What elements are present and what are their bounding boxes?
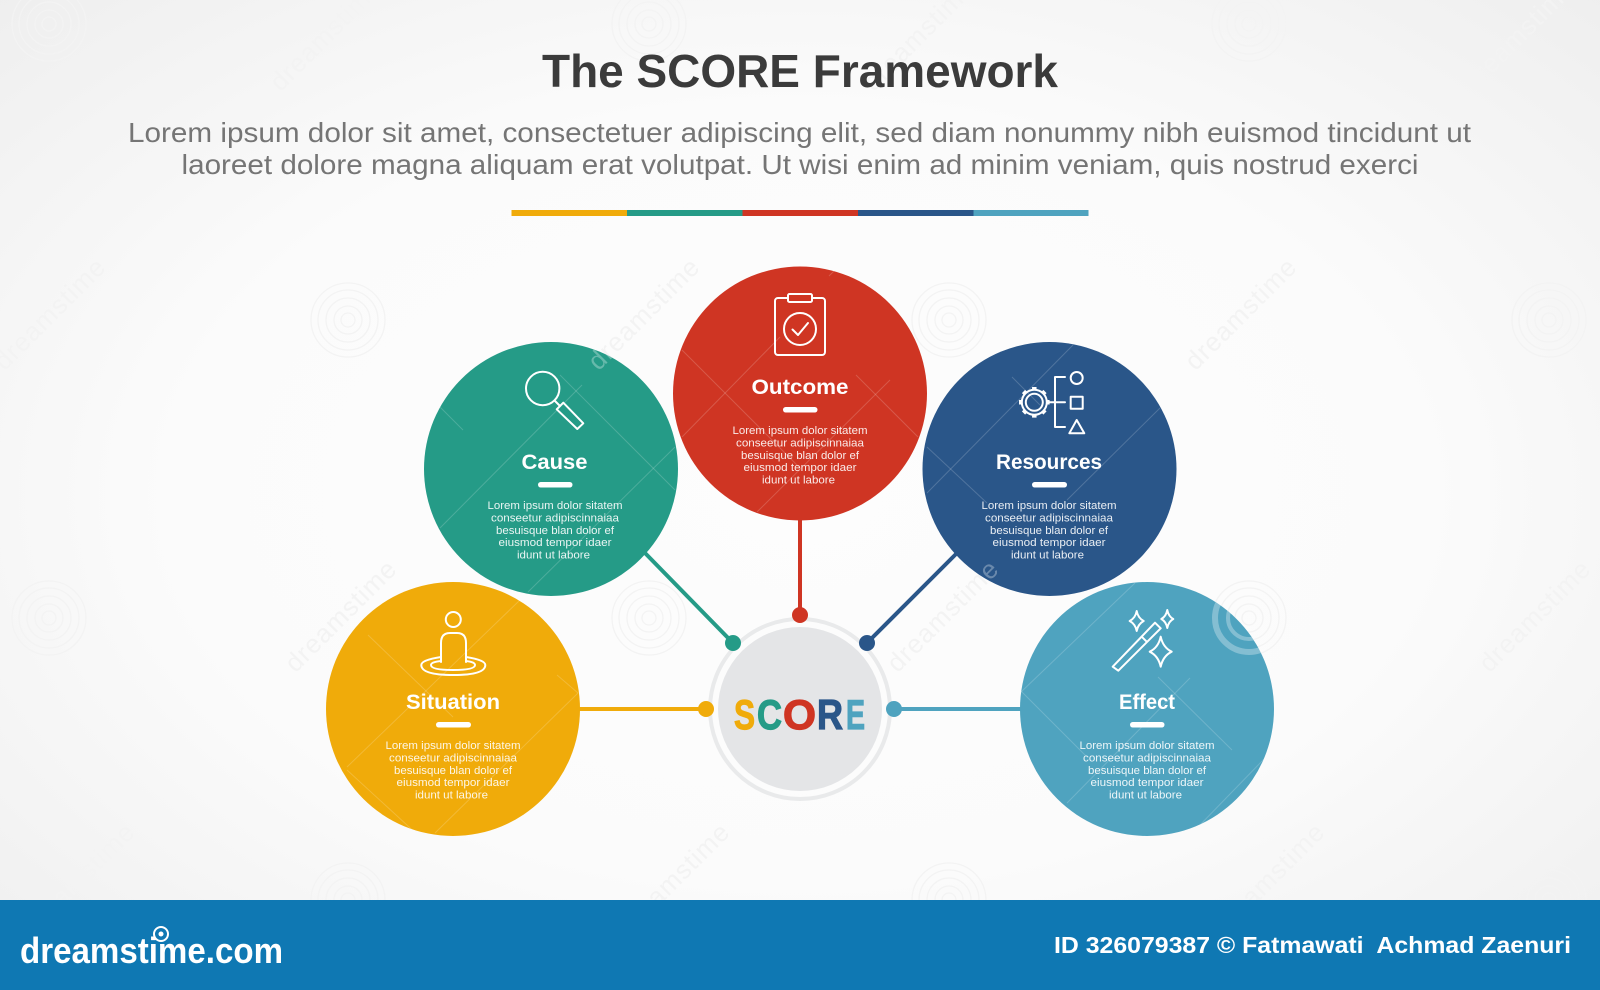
colored divider bar	[512, 210, 1088, 216]
dash	[1130, 722, 1164, 728]
dash	[538, 482, 572, 488]
body text: besuisque blan dolor ef	[741, 450, 860, 462]
panel: Effect	[1020, 582, 1274, 836]
infographic canvas: dreamstime	[1472, 553, 1597, 678]
subtitle text	[128, 117, 1471, 180]
panel: Resources	[922, 342, 1176, 596]
body text	[1080, 740, 1214, 802]
body text: Lorem ipsum dolor sitatem	[386, 740, 520, 752]
connector: Situation to hub	[578, 701, 714, 717]
infographic canvas: dreamstime	[1178, 251, 1303, 376]
body text	[732, 425, 868, 487]
body text: besuisque blan dolor ef	[1088, 765, 1207, 777]
icon: person in target	[421, 612, 485, 675]
panel: Cause	[424, 342, 678, 596]
connector: Effect to hub	[886, 701, 1022, 717]
infographic canvas: dreamstime	[581, 251, 706, 376]
body text: conseetur adipiscinnaiaa	[491, 512, 620, 524]
body text: idunt ut labore	[1011, 550, 1084, 562]
body text	[386, 740, 520, 802]
body text: eiusmod tempor idaer	[498, 537, 612, 549]
body text: idunt ut labore	[517, 550, 590, 562]
infographic canvas: dreamstime	[880, 553, 1005, 678]
body text: idunt ut labore	[415, 790, 488, 802]
dash	[783, 407, 818, 412]
icon: clipboard with check	[775, 294, 825, 355]
infographic canvas: dreamstime	[611, 816, 736, 941]
hub label: SCORE: E	[846, 691, 865, 738]
panel: Situation	[326, 582, 580, 837]
body text: idunt ut labore	[1109, 790, 1182, 802]
body text	[488, 500, 622, 562]
body text	[982, 500, 1116, 562]
body text: eiusmod tempor idaer	[992, 537, 1106, 549]
infographic canvas: dreamstime	[581, 251, 706, 376]
heading: Outcome: Outcome	[752, 376, 848, 399]
body text: eiusmod tempor idaer	[396, 777, 510, 789]
center hub: SCORE	[710, 619, 890, 799]
body text: idunt ut labore	[762, 475, 835, 487]
connector: Cause to hub	[645, 553, 741, 651]
hub label: SCORE: C	[757, 691, 782, 738]
body text: Lorem ipsum dolor sitatem	[488, 500, 622, 512]
panel: Outcome	[673, 260, 927, 520]
title: The SCORE Framework	[542, 45, 1058, 97]
hub label: SCORE: S	[734, 691, 755, 738]
dash	[1032, 482, 1067, 488]
infographic canvas: dreamstime	[16, 816, 141, 941]
body text: Lorem ipsum dolor sitatem	[732, 425, 868, 437]
hub label: SCORE: O	[783, 691, 816, 738]
body text: conseetur adipiscinnaiaa	[736, 437, 865, 449]
dash	[436, 722, 471, 728]
infographic canvas: dreamstime	[1206, 816, 1331, 941]
icon: gear with shapes	[1019, 372, 1084, 433]
hub label: SCORE: R	[817, 691, 843, 738]
subtitle text: Lorem ipsum dolor sit amet, consectetuer adipiscing elit, sed diam nonummy nibh euismod tincidunt ut	[128, 117, 1471, 148]
body text: besuisque blan dolor ef	[394, 765, 513, 777]
icon: magnifying glass	[526, 372, 583, 429]
body text: besuisque blan dolor ef	[496, 525, 615, 537]
body text: Lorem ipsum dolor sitatem	[982, 500, 1116, 512]
icon: magic wand with sparkles	[1113, 610, 1173, 671]
infographic canvas: dreamstime	[880, 553, 1005, 678]
body text: eiusmod tempor idaer	[744, 462, 857, 474]
body text: conseetur adipiscinnaiaa	[985, 512, 1114, 524]
heading: Effect: Effect	[1119, 691, 1175, 714]
heading: Resources: Resources	[996, 451, 1102, 474]
infographic canvas: dreamstime	[278, 553, 403, 678]
heading: Cause: Cause	[522, 451, 588, 474]
footer credit: ID 326079387 © Fatmawati Achmad Zaenuri	[1054, 932, 1571, 958]
connector: Resources to hub	[859, 553, 957, 651]
body text: Lorem ipsum dolor sitatem	[1080, 740, 1214, 752]
connector: Outcome to hub	[792, 518, 808, 623]
footer bar	[0, 900, 1600, 990]
heading: Situation: Situation	[406, 691, 500, 714]
footer logo: dreamstime.com: dreamstime.com	[20, 930, 283, 971]
body text: conseetur adipiscinnaiaa	[389, 752, 518, 764]
body text: besuisque blan dolor ef	[990, 525, 1109, 537]
hub label: SCORE	[734, 691, 865, 738]
body text: conseetur adipiscinnaiaa	[1083, 752, 1212, 764]
subtitle text: laoreet dolore magna aliquam erat volutpat. Ut wisi enim ad minim veniam, quis nostrud exerci	[182, 149, 1418, 180]
body text: eiusmod tempor idaer	[1090, 777, 1204, 789]
